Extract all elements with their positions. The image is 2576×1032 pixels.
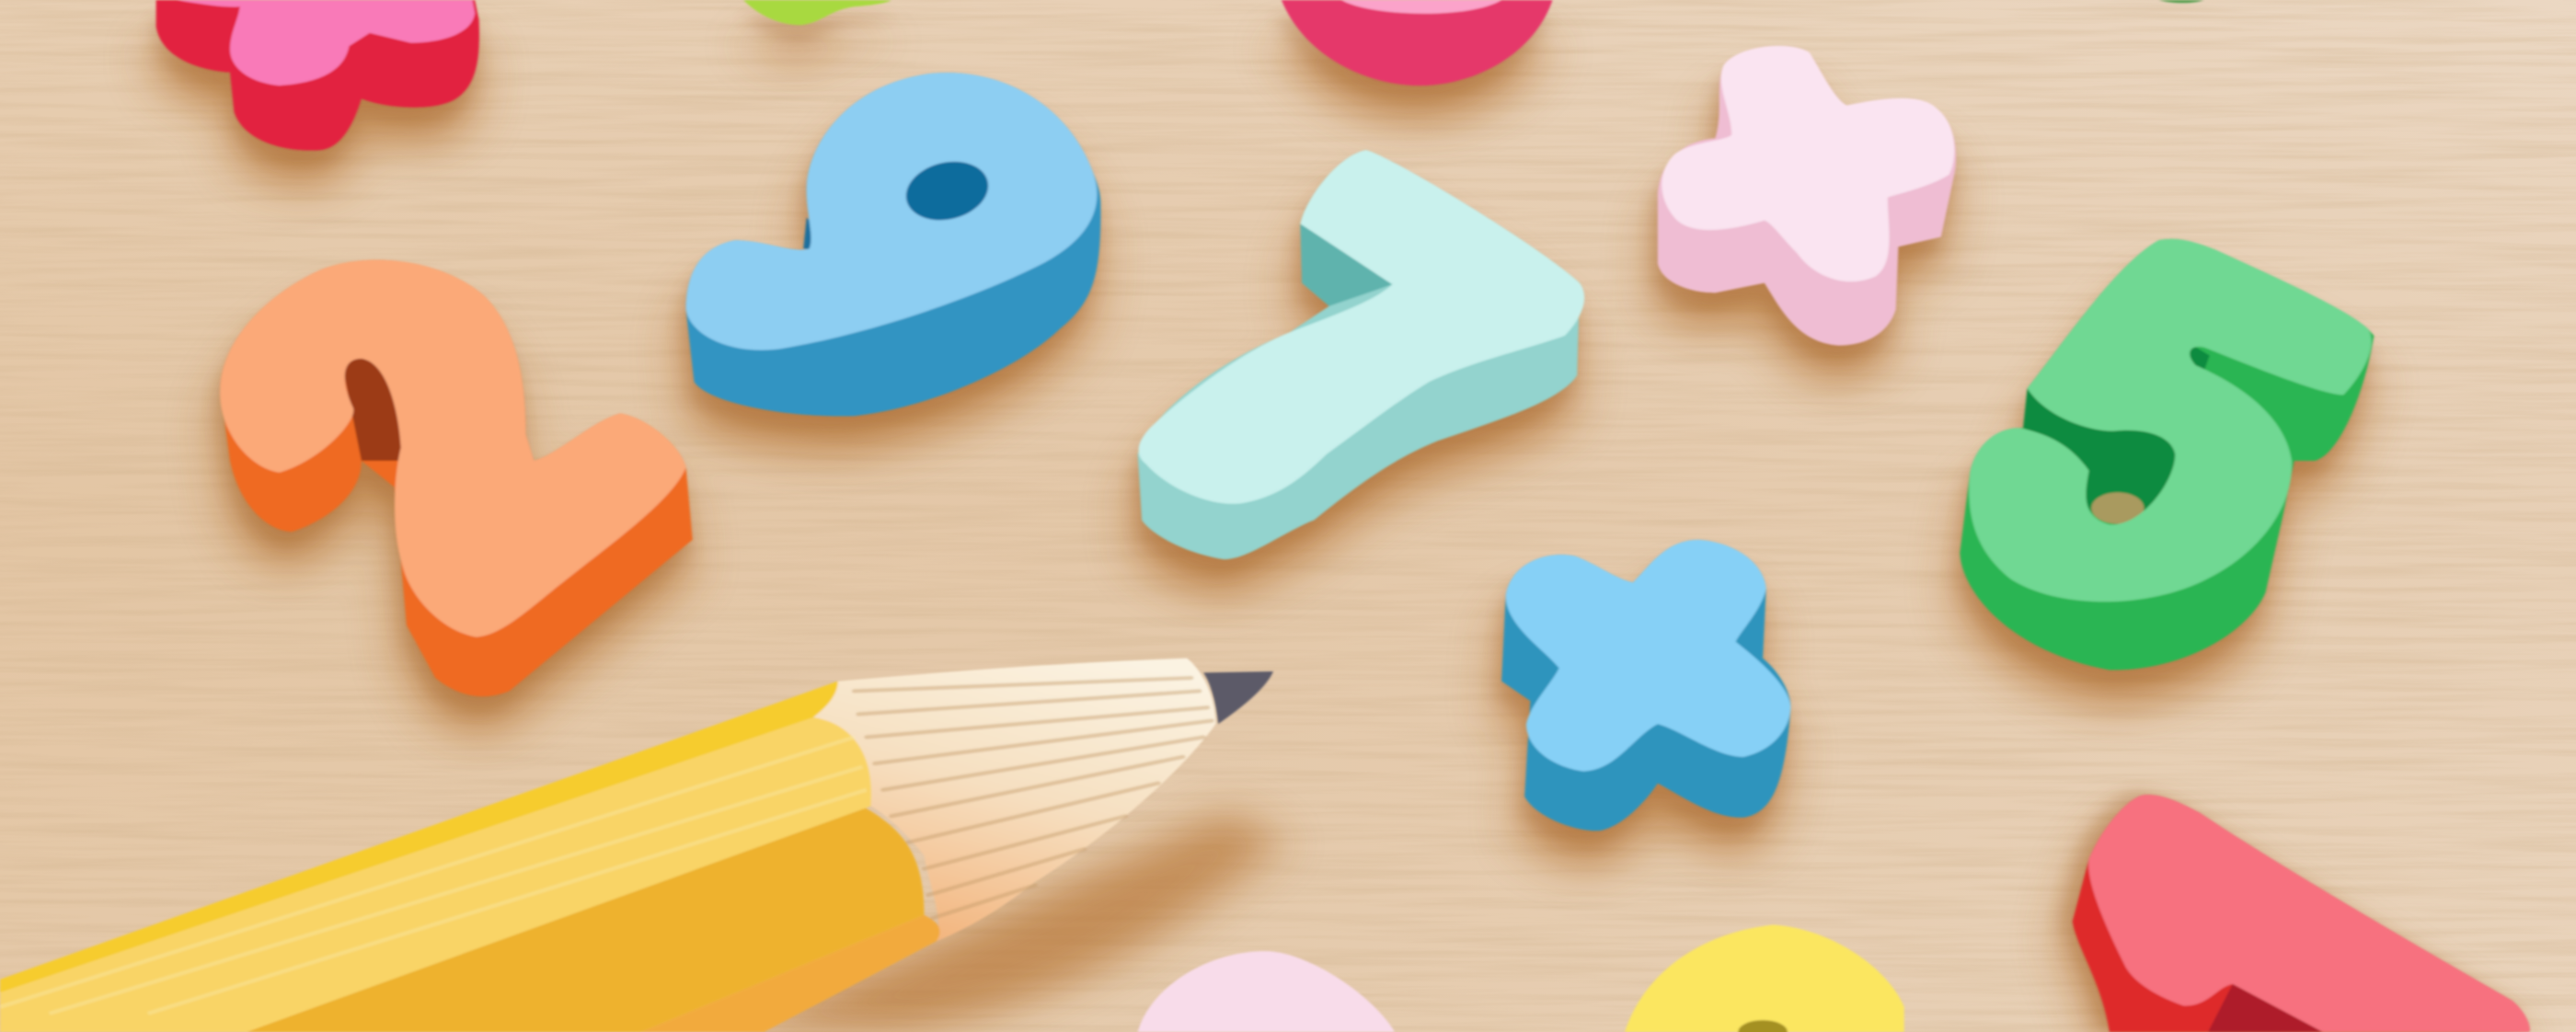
pencil wood cone <box>813 659 1215 941</box>
symbol: blue cross <box>1501 540 1790 831</box>
shape: green piece at top <box>743 0 891 25</box>
hole of the nine <box>893 151 1001 232</box>
shape: pink and red piece at top centre <box>1282 0 1553 86</box>
shape: green speck at top right <box>2158 0 2204 3</box>
pencil lower facet <box>640 915 939 1032</box>
shape: pink and red flower at top left <box>156 0 479 150</box>
shape: pale pink piece at bottom <box>1138 951 1395 1032</box>
pencil graphite tip <box>1203 671 1273 724</box>
number: blue nine <box>686 73 1100 416</box>
number: orange two <box>220 260 693 696</box>
symbol: pale pink cross <box>1658 46 1956 346</box>
pencil wood stripes <box>855 678 1212 918</box>
pencil <box>0 659 1273 1032</box>
pencil light facet <box>0 717 871 1032</box>
number: red one at bottom right <box>2073 795 2530 1032</box>
pencil amber facet <box>247 807 924 1032</box>
pencil body grain lines <box>0 737 867 1014</box>
number: green five <box>1960 239 2374 670</box>
number: mint seven <box>1138 150 1584 559</box>
pencil top facet <box>0 682 838 992</box>
number: yellow piece at bottom <box>1625 924 1904 1032</box>
